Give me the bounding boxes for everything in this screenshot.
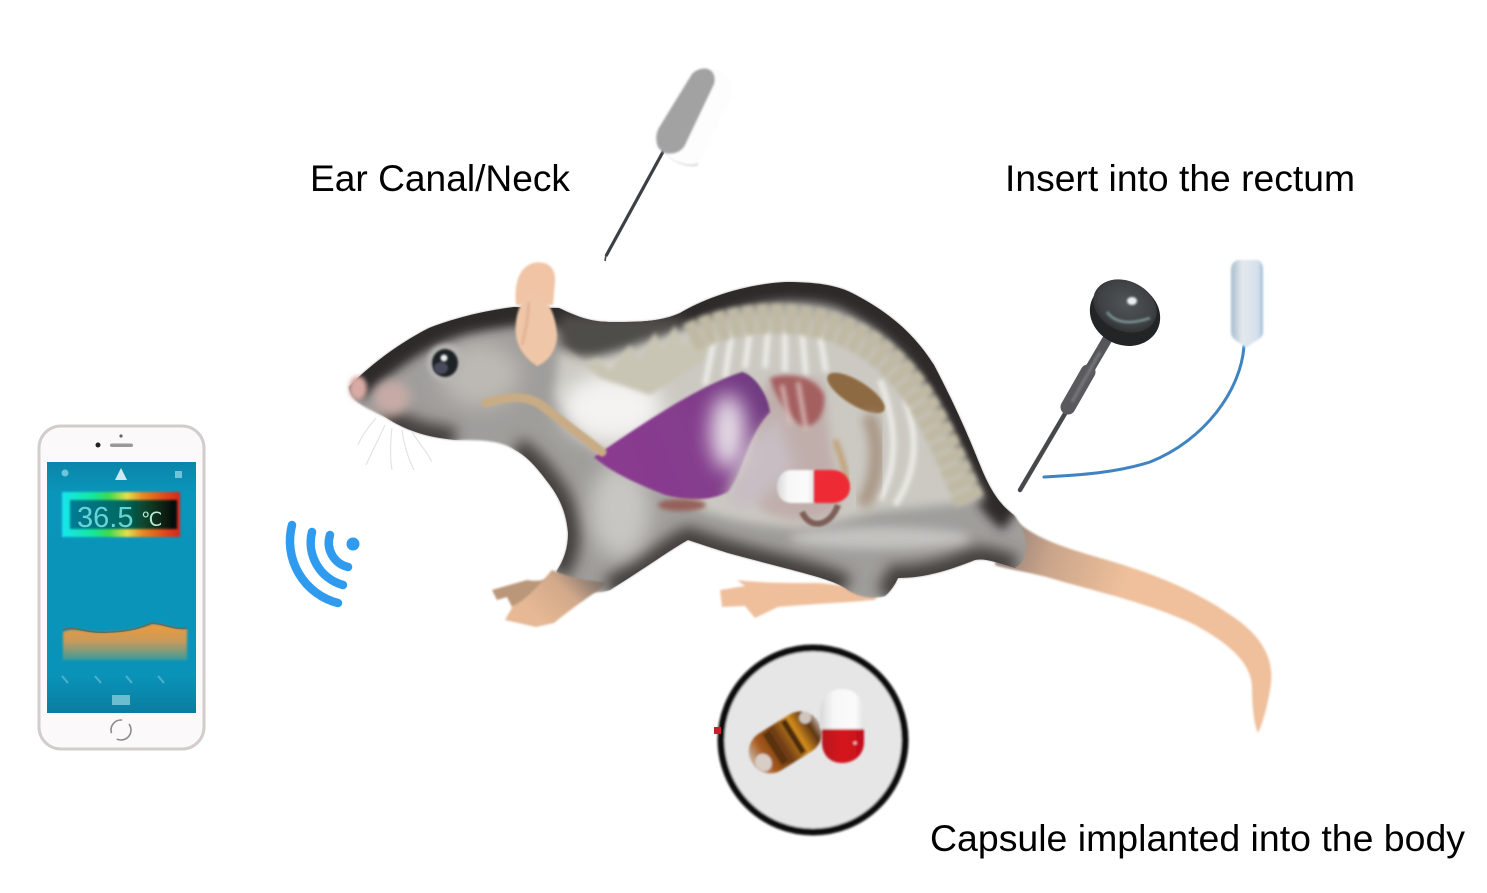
- heart / red organ: [770, 375, 824, 426]
- label: Insert into the rectum: Insert into the rectum: [1005, 158, 1355, 199]
- phone earpiece and camera: [96, 434, 133, 448]
- rat rear toes of front paw: [492, 575, 560, 610]
- temperature gauge: 36.5: [77, 502, 133, 534]
- shoulder skeleton: [560, 325, 712, 395]
- app bottom controls: [62, 676, 164, 705]
- ribs: [705, 330, 914, 505]
- cheek highlight: [440, 343, 520, 407]
- body shading and internal organs: [349, 282, 1015, 596]
- rat whiskers: [358, 418, 432, 470]
- icon: rectal probe black: [1020, 269, 1171, 490]
- phone home button: [111, 720, 131, 740]
- temperature gauge: ℃: [141, 510, 162, 531]
- rat eye: [427, 344, 465, 382]
- rat body silhouette: [349, 282, 1026, 598]
- app header icons: [62, 468, 182, 480]
- liver highlight: [710, 394, 746, 470]
- rat back ear: [516, 262, 555, 305]
- liver purple: [594, 372, 770, 499]
- rat nose: [349, 376, 367, 400]
- chest white glow: [562, 374, 662, 442]
- rat hind paw: [720, 580, 880, 618]
- rat front ear: [516, 293, 557, 366]
- phone screen: [47, 462, 196, 713]
- lower organ reddish: [658, 499, 706, 511]
- front paw with leg: [505, 570, 610, 627]
- implanted capsule in rat: [777, 470, 850, 503]
- lower body shading: [385, 417, 1015, 596]
- illustration: rat with internal anatomy: [349, 262, 1271, 733]
- intestines: [862, 415, 876, 505]
- rat tail: [995, 508, 1271, 733]
- red and white capsule: [820, 689, 864, 763]
- icon: wireless signal: [290, 525, 360, 603]
- liver fade to the right: [725, 415, 795, 510]
- cutaway skeleton area: [554, 313, 985, 528]
- ear inner fold: [522, 302, 529, 345]
- label: Capsule implanted into the body: Capsule implanted into the body: [930, 818, 1466, 859]
- oesophagus tube: [486, 398, 602, 452]
- head and back fur shading: [349, 282, 1014, 515]
- icon: ear canal / neck probe: [605, 68, 732, 261]
- circle: capsule detail: [714, 648, 905, 832]
- red organ streaks: [782, 382, 806, 430]
- shoulder dark patch: [556, 312, 686, 362]
- temperature gauge: [62, 492, 180, 537]
- brown transparent capsule: [741, 704, 830, 781]
- red marker dot: [714, 727, 721, 734]
- abdominal organs: [751, 378, 840, 521]
- temperature trend chart: [63, 623, 187, 660]
- phone body: [39, 426, 204, 749]
- icon: rectal probe blue capsule with wire: [1044, 260, 1263, 477]
- kidney: [826, 371, 886, 414]
- snout pink: [374, 381, 410, 415]
- label: Ear Canal/Neck: Ear Canal/Neck: [310, 158, 571, 199]
- spine: [690, 319, 970, 502]
- icon: smartphone with temperature app: [39, 426, 204, 749]
- belly highlight: [590, 462, 650, 558]
